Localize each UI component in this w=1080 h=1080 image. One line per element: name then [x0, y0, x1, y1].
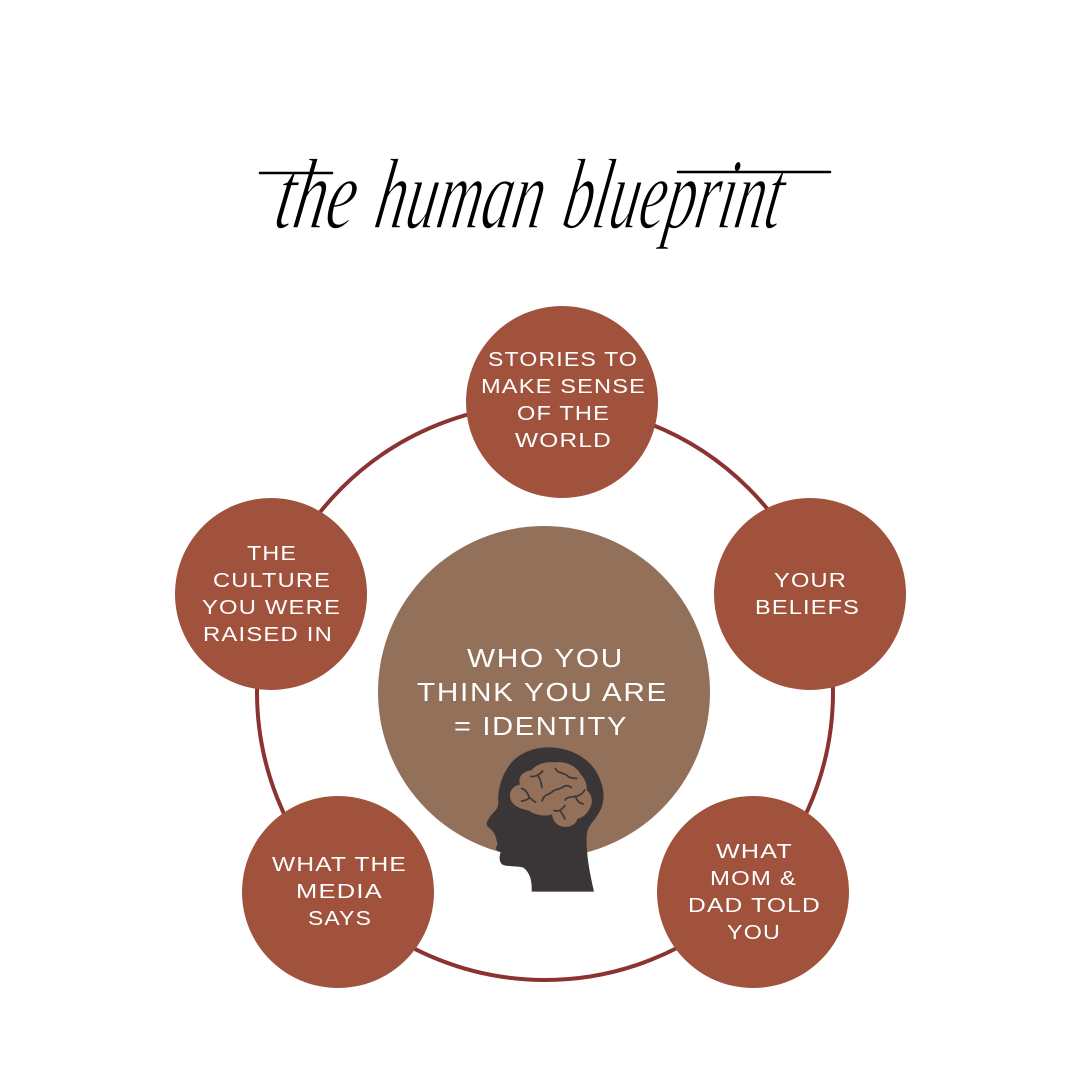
node: culture — [175, 498, 367, 690]
node: parents: WHAT — [716, 841, 793, 863]
node: parents: DAD TOLD — [688, 895, 821, 917]
node: culture: CULTURE — [213, 570, 331, 592]
node: media — [242, 796, 434, 988]
node: parents — [657, 796, 849, 988]
title — [260, 139, 830, 251]
node: culture: THE — [247, 543, 297, 565]
node: stories — [466, 306, 658, 498]
center text: = IDENTITY — [454, 711, 628, 741]
node: stories: MAKE SENSE — [481, 376, 646, 398]
node: media: SAYS — [308, 908, 372, 930]
node: parents: MOM & — [710, 868, 797, 890]
node: media: MEDIA — [296, 881, 383, 903]
node: beliefs — [714, 498, 906, 690]
node: media: WHAT THE — [272, 854, 407, 876]
center text: THINK YOU ARE — [417, 677, 668, 707]
title: blueprint — [556, 139, 795, 251]
node: stories: WORLD — [515, 430, 612, 452]
title: human — [368, 139, 556, 251]
connecting ring — [257, 404, 833, 980]
node: beliefs: YOUR — [774, 570, 847, 592]
title: the — [268, 139, 368, 251]
node: beliefs: BELIEFS — [755, 597, 860, 619]
center text — [417, 643, 668, 741]
node: culture: YOU WERE — [202, 597, 341, 619]
icon: head with brain — [487, 747, 604, 892]
center text: WHO YOU — [467, 643, 624, 673]
node: culture: RAISED IN — [203, 624, 333, 646]
center circle: identity — [378, 526, 710, 858]
node: parents: YOU — [727, 922, 781, 944]
node: stories: STORIES TO — [488, 349, 638, 371]
node: stories: OF THE — [517, 403, 610, 425]
